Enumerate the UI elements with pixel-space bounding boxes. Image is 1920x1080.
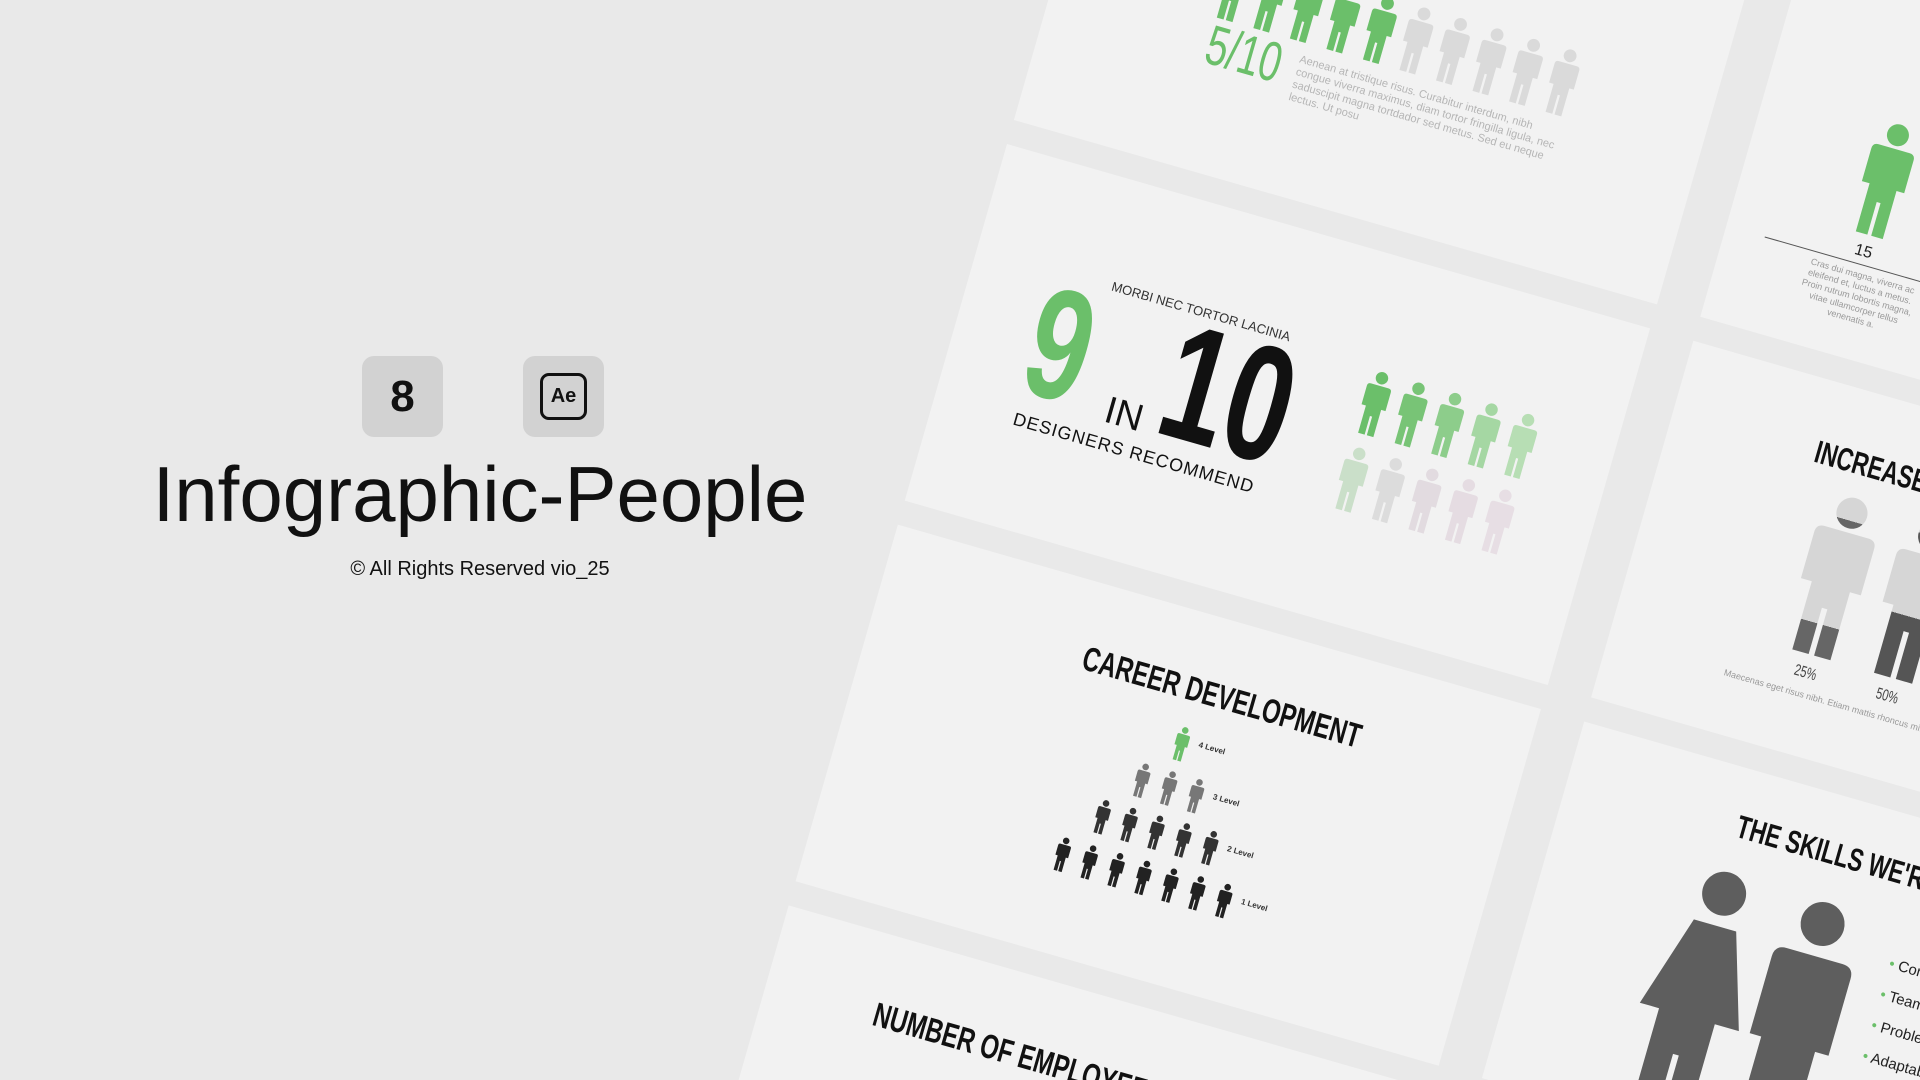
pyramid bbox=[1054, 727, 1232, 918]
level labels: 2 Level bbox=[1226, 844, 1255, 860]
subtitle: © All Rights Reserved vio_25 bbox=[350, 558, 610, 580]
woman figure bbox=[1638, 872, 1746, 1080]
panel: increased: 50% bbox=[1874, 685, 1900, 708]
panel: 15 bbox=[1700, 0, 1920, 501]
5/10 number: 5/10 bbox=[1199, 13, 1290, 94]
level labels: 3 Level bbox=[1212, 792, 1240, 808]
figure 50% bbox=[1874, 530, 1920, 684]
level labels: 4 Level bbox=[1198, 740, 1226, 756]
badge: 8: 8 bbox=[390, 372, 415, 421]
level labels bbox=[1198, 740, 1269, 913]
designers recommend: DESIGNERS RECOMMEND bbox=[1011, 409, 1257, 497]
caption: Cras dui magna, viverra ac eleifend et, luctus a metus. Proin rutrum lobortis magna, vitae ullamcorper tellus venenatis a. bbox=[1801, 256, 1916, 330]
people row 5 of 10 bbox=[1216, 0, 1580, 116]
panel: skills bbox=[1482, 721, 1920, 1080]
skills list bbox=[1861, 955, 1920, 1080]
panel: number of employees bbox=[686, 905, 1432, 1080]
title: Infographic-People bbox=[153, 450, 807, 538]
panel: 5/10 bbox=[1014, 0, 1759, 304]
panel: 9 in 10 bbox=[905, 144, 1650, 685]
axis line bbox=[1765, 236, 1920, 298]
panel: increased bbox=[1591, 341, 1920, 882]
level labels: 1 Level bbox=[1240, 897, 1269, 913]
badge: 8 bbox=[362, 356, 443, 437]
slide collage bbox=[739, 0, 1920, 1080]
IN: IN bbox=[1100, 389, 1148, 440]
people grid bbox=[1336, 372, 1538, 554]
value 15: 15 bbox=[1852, 241, 1874, 262]
paragraph: Aenean at tristique risus. Curabitur interdum, nibh congue viverra maximus, diam tortor fringilla ligula, nec saduscipit magna tortdador sed metus. Sed eu neque lectus. Ut posu bbox=[1287, 54, 1556, 162]
badge: Ae: Ae bbox=[551, 385, 576, 407]
figure 25% bbox=[1792, 498, 1874, 660]
9: 9 bbox=[1006, 252, 1114, 439]
panel: career development bbox=[796, 525, 1541, 1066]
badge: Ae bbox=[523, 356, 604, 437]
10: 10 bbox=[1142, 288, 1316, 500]
labels: 25% bbox=[1792, 662, 1818, 684]
man figure bbox=[1748, 902, 1852, 1080]
heading: CAREER DEVELOPMENT bbox=[1078, 640, 1366, 756]
big green person bbox=[1856, 124, 1914, 240]
kicker: MORBI NEC TORTOR LACINIA bbox=[1110, 279, 1292, 344]
